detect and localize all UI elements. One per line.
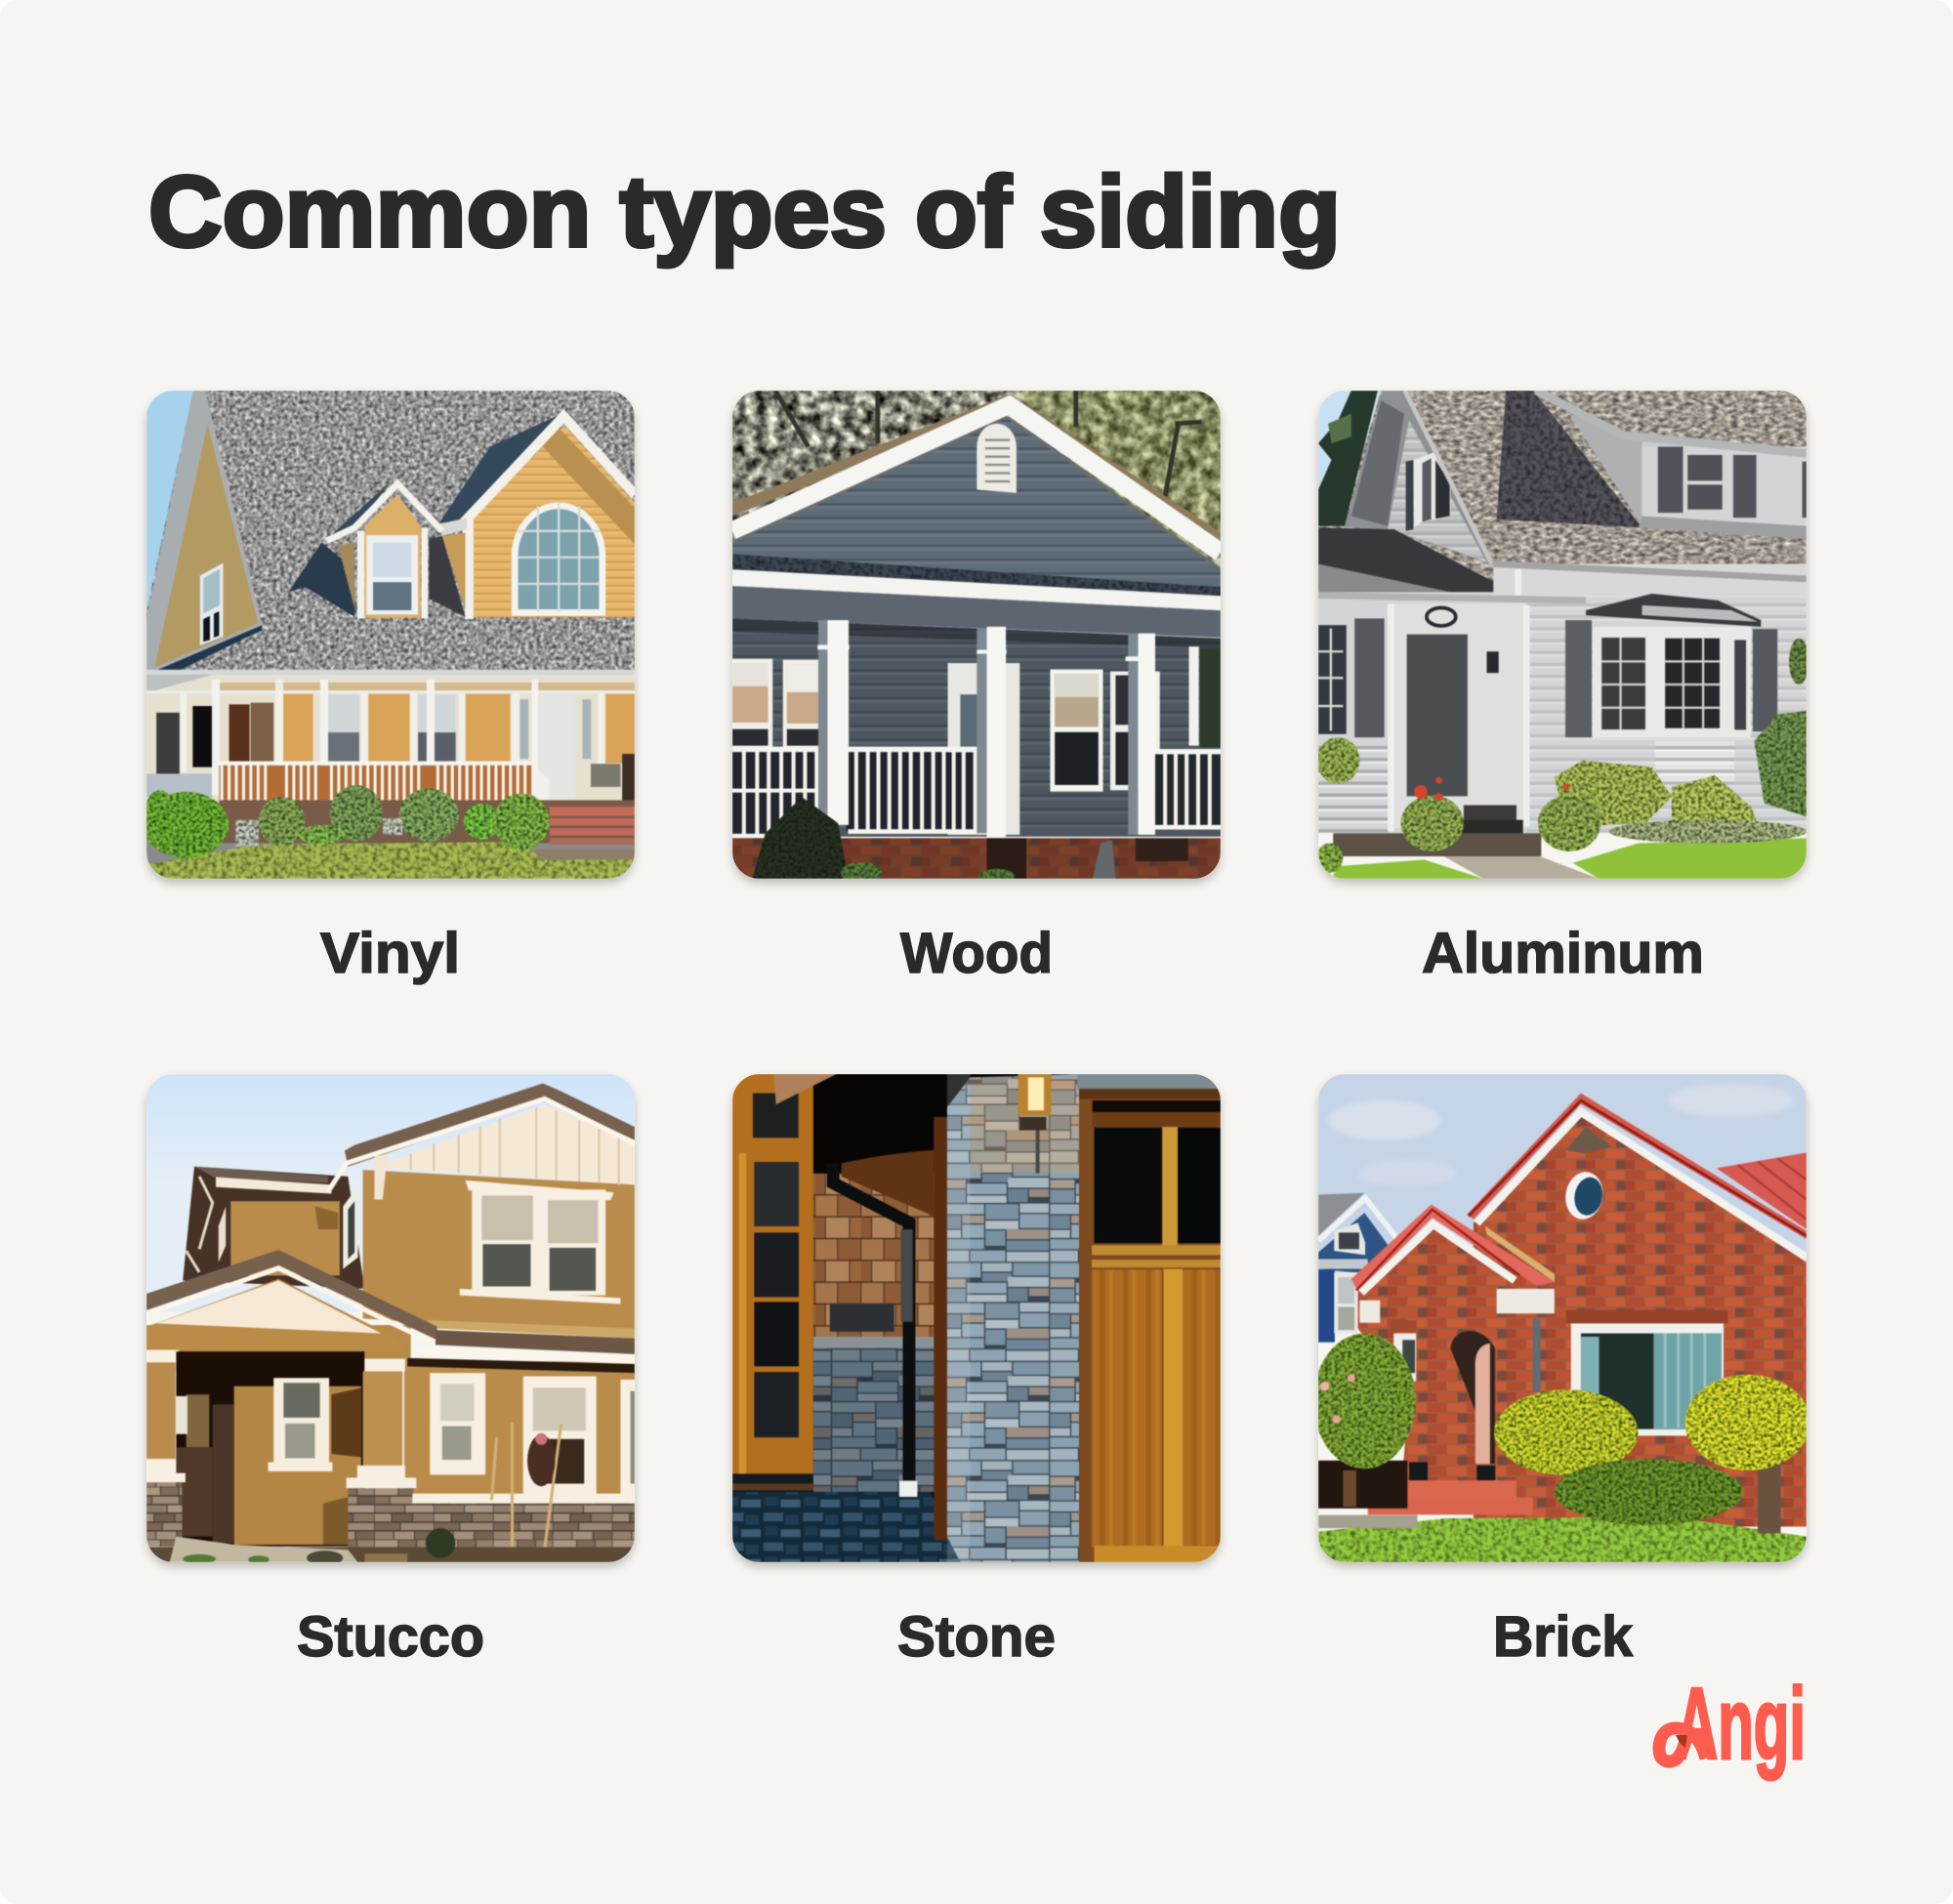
- left gable: [1345, 391, 1492, 565]
- white siding wall: [1318, 560, 1807, 833]
- lawn: [1318, 1516, 1807, 1562]
- logo: Angi: Angi: [1676, 1668, 1806, 1781]
- porch roof: [1318, 527, 1579, 596]
- ground floor windows: [430, 1373, 635, 1495]
- label: Wood: Wood: [900, 922, 1053, 985]
- shrubs: [144, 785, 550, 858]
- card: Aluminum siding house: [1318, 391, 1807, 879]
- paving: [732, 1492, 960, 1562]
- small dormer: [288, 481, 465, 618]
- porch beam: [732, 586, 1221, 638]
- porch wall: [732, 618, 1221, 837]
- shrubs and flower planters: [1316, 639, 1808, 873]
- logo: Angi: [1659, 1668, 1806, 1781]
- card: Wood siding house: [732, 391, 1221, 879]
- white fascia: [732, 569, 1221, 610]
- upper window: [460, 1180, 620, 1304]
- label: Stucco: Stucco: [297, 1605, 484, 1669]
- dark recess: [732, 1074, 1221, 1562]
- roof: [146, 391, 635, 879]
- shadowed roof plane: [1497, 391, 1642, 527]
- flowers: [1414, 777, 1569, 801]
- white porch columns: [817, 620, 1155, 838]
- round window: [1561, 1169, 1606, 1222]
- left gable: [146, 391, 262, 686]
- downpipe: [833, 1163, 917, 1497]
- windows: [732, 646, 1221, 835]
- stone trim and downpipe: [1359, 1289, 1555, 1391]
- steps: [1368, 1480, 1533, 1514]
- porch: [146, 670, 635, 816]
- upper dormer: [1536, 391, 1807, 539]
- brick foundation: [732, 838, 1221, 879]
- entry with door: [1318, 603, 1530, 840]
- main roof trim: [1467, 1094, 1807, 1258]
- lower roof and eave: [407, 1330, 635, 1373]
- white bargeboard: [732, 405, 1221, 553]
- lower stone wall: [813, 1337, 935, 1492]
- rear upper storey: [183, 1167, 364, 1289]
- lower main roof: [1480, 522, 1807, 579]
- label: Stone: Stone: [897, 1605, 1056, 1669]
- young tree: [492, 1423, 561, 1562]
- shake shingle wall: [813, 1150, 935, 1339]
- roof edge: [732, 393, 1221, 539]
- shrubs: [752, 797, 1015, 884]
- wood entry door: [732, 1074, 813, 1494]
- railing: [732, 747, 1221, 839]
- cloudy sky: [1318, 1074, 1807, 1305]
- stone column: [947, 1074, 1221, 1562]
- attic vent: [976, 424, 1017, 493]
- wall lantern: [1018, 1074, 1051, 1173]
- sky and pine tree: [1318, 391, 1381, 526]
- title: Common types of siding: [148, 155, 1341, 268]
- stone veneer: [412, 1494, 635, 1550]
- label: Vinyl: Vinyl: [320, 922, 460, 985]
- front pillars: [146, 1349, 416, 1552]
- neighbouring blue house: [1318, 1193, 1397, 1343]
- main brick gable: [1474, 1114, 1807, 1526]
- sky: [146, 391, 193, 612]
- arched porch entry: [1409, 1331, 1495, 1485]
- awning bracket: [773, 1074, 837, 1104]
- label: Aluminum: Aluminum: [1422, 922, 1704, 985]
- bay window: [1565, 594, 1777, 784]
- lower storey wall: [146, 1320, 635, 1500]
- steps: [219, 800, 635, 861]
- shrubs: [1313, 1334, 1810, 1533]
- shingle band: [732, 554, 1221, 596]
- dark porch recess: [176, 1351, 364, 1547]
- upper gable: [328, 1083, 635, 1200]
- lower porch gable: [146, 1250, 437, 1371]
- lawn: [146, 842, 635, 879]
- steps and lawn: [1332, 833, 1807, 879]
- back metal roof: [1717, 1153, 1807, 1229]
- roof background: [1318, 391, 1807, 596]
- porch brick gable: [1351, 1205, 1555, 1494]
- porch wall and door: [175, 1378, 361, 1545]
- ground and planting: [146, 1528, 635, 1565]
- card: Vinyl siding house: [146, 391, 635, 879]
- main upper wall: [363, 1170, 635, 1339]
- picture window: [1566, 1310, 1727, 1435]
- card: Stone siding house: [732, 1074, 1221, 1562]
- trees behind the house: [732, 391, 1221, 575]
- wood post: [934, 1117, 949, 1540]
- garage door: [1079, 1089, 1221, 1562]
- right dormer gable with arched window: [438, 415, 635, 619]
- card: Brick siding house: [1318, 1074, 1807, 1562]
- grey gable siding: [732, 414, 1221, 618]
- label: Brick: Brick: [1493, 1605, 1634, 1669]
- card: Stucco siding house: [146, 1074, 635, 1562]
